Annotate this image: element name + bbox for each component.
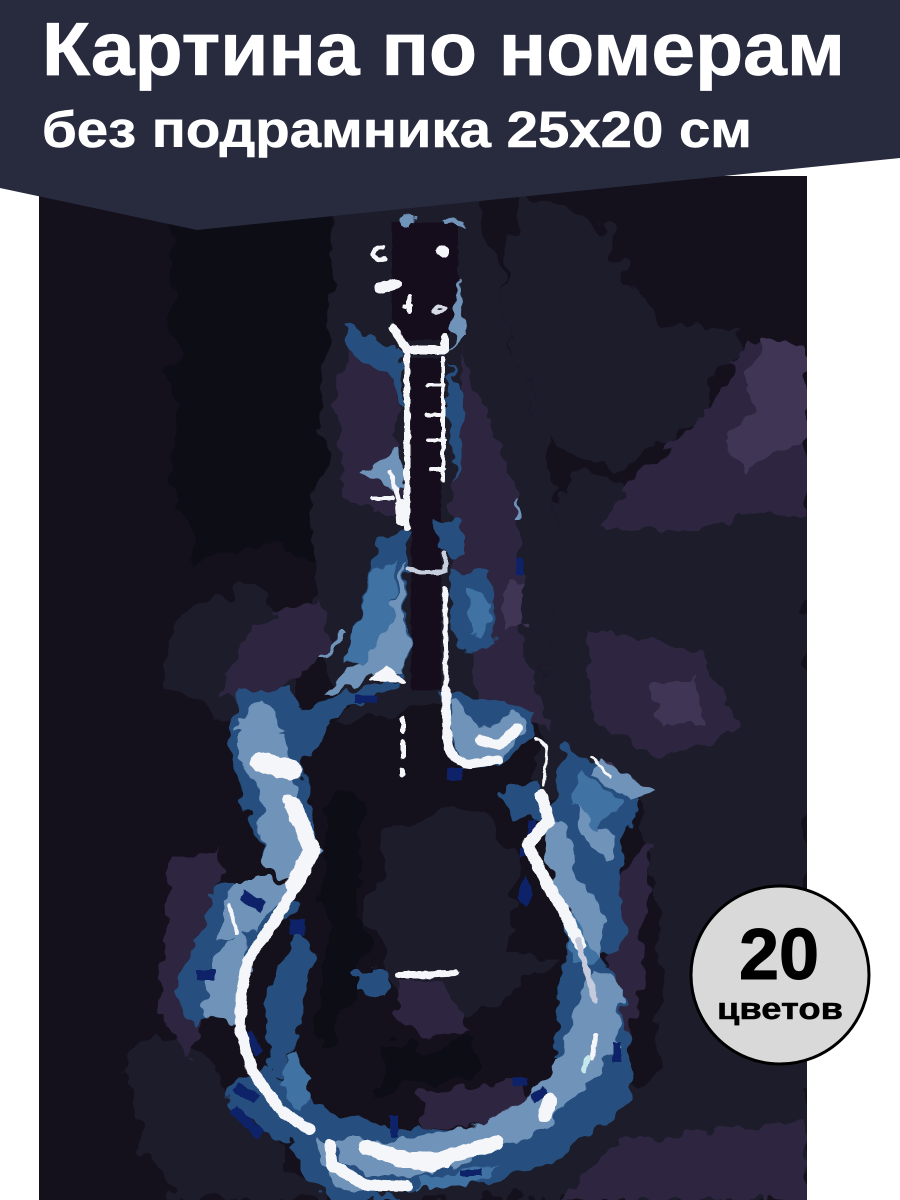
icon: guitar white outline <box>229 245 610 1186</box>
subtitle: без подрамника 25х20 см <box>42 101 752 158</box>
dark smoke, left <box>176 495 358 1048</box>
icon: deep navy accents <box>197 558 621 1176</box>
neck and frets <box>370 328 518 775</box>
lighter purple smoke <box>160 340 807 1200</box>
body outline <box>229 739 610 1186</box>
painting <box>39 176 807 1200</box>
guitar head and neck shadow <box>392 222 458 690</box>
icon: tuning pegs <box>374 245 449 312</box>
light violet patches <box>505 340 807 810</box>
badge: 20 colours: 20 <box>739 915 819 995</box>
icon: dark blue flame <box>170 325 640 1200</box>
icon: mid and pale blue flame <box>205 214 650 1190</box>
title: Картина по номерам <box>42 7 845 91</box>
purple smoke, right and lower <box>120 190 807 1200</box>
icon: medium blue detail <box>280 560 620 1190</box>
badge: 20 colours <box>691 886 869 1064</box>
badge: 20 colours: цветов <box>717 991 843 1026</box>
painting background <box>39 176 807 1200</box>
header banner <box>0 0 900 230</box>
